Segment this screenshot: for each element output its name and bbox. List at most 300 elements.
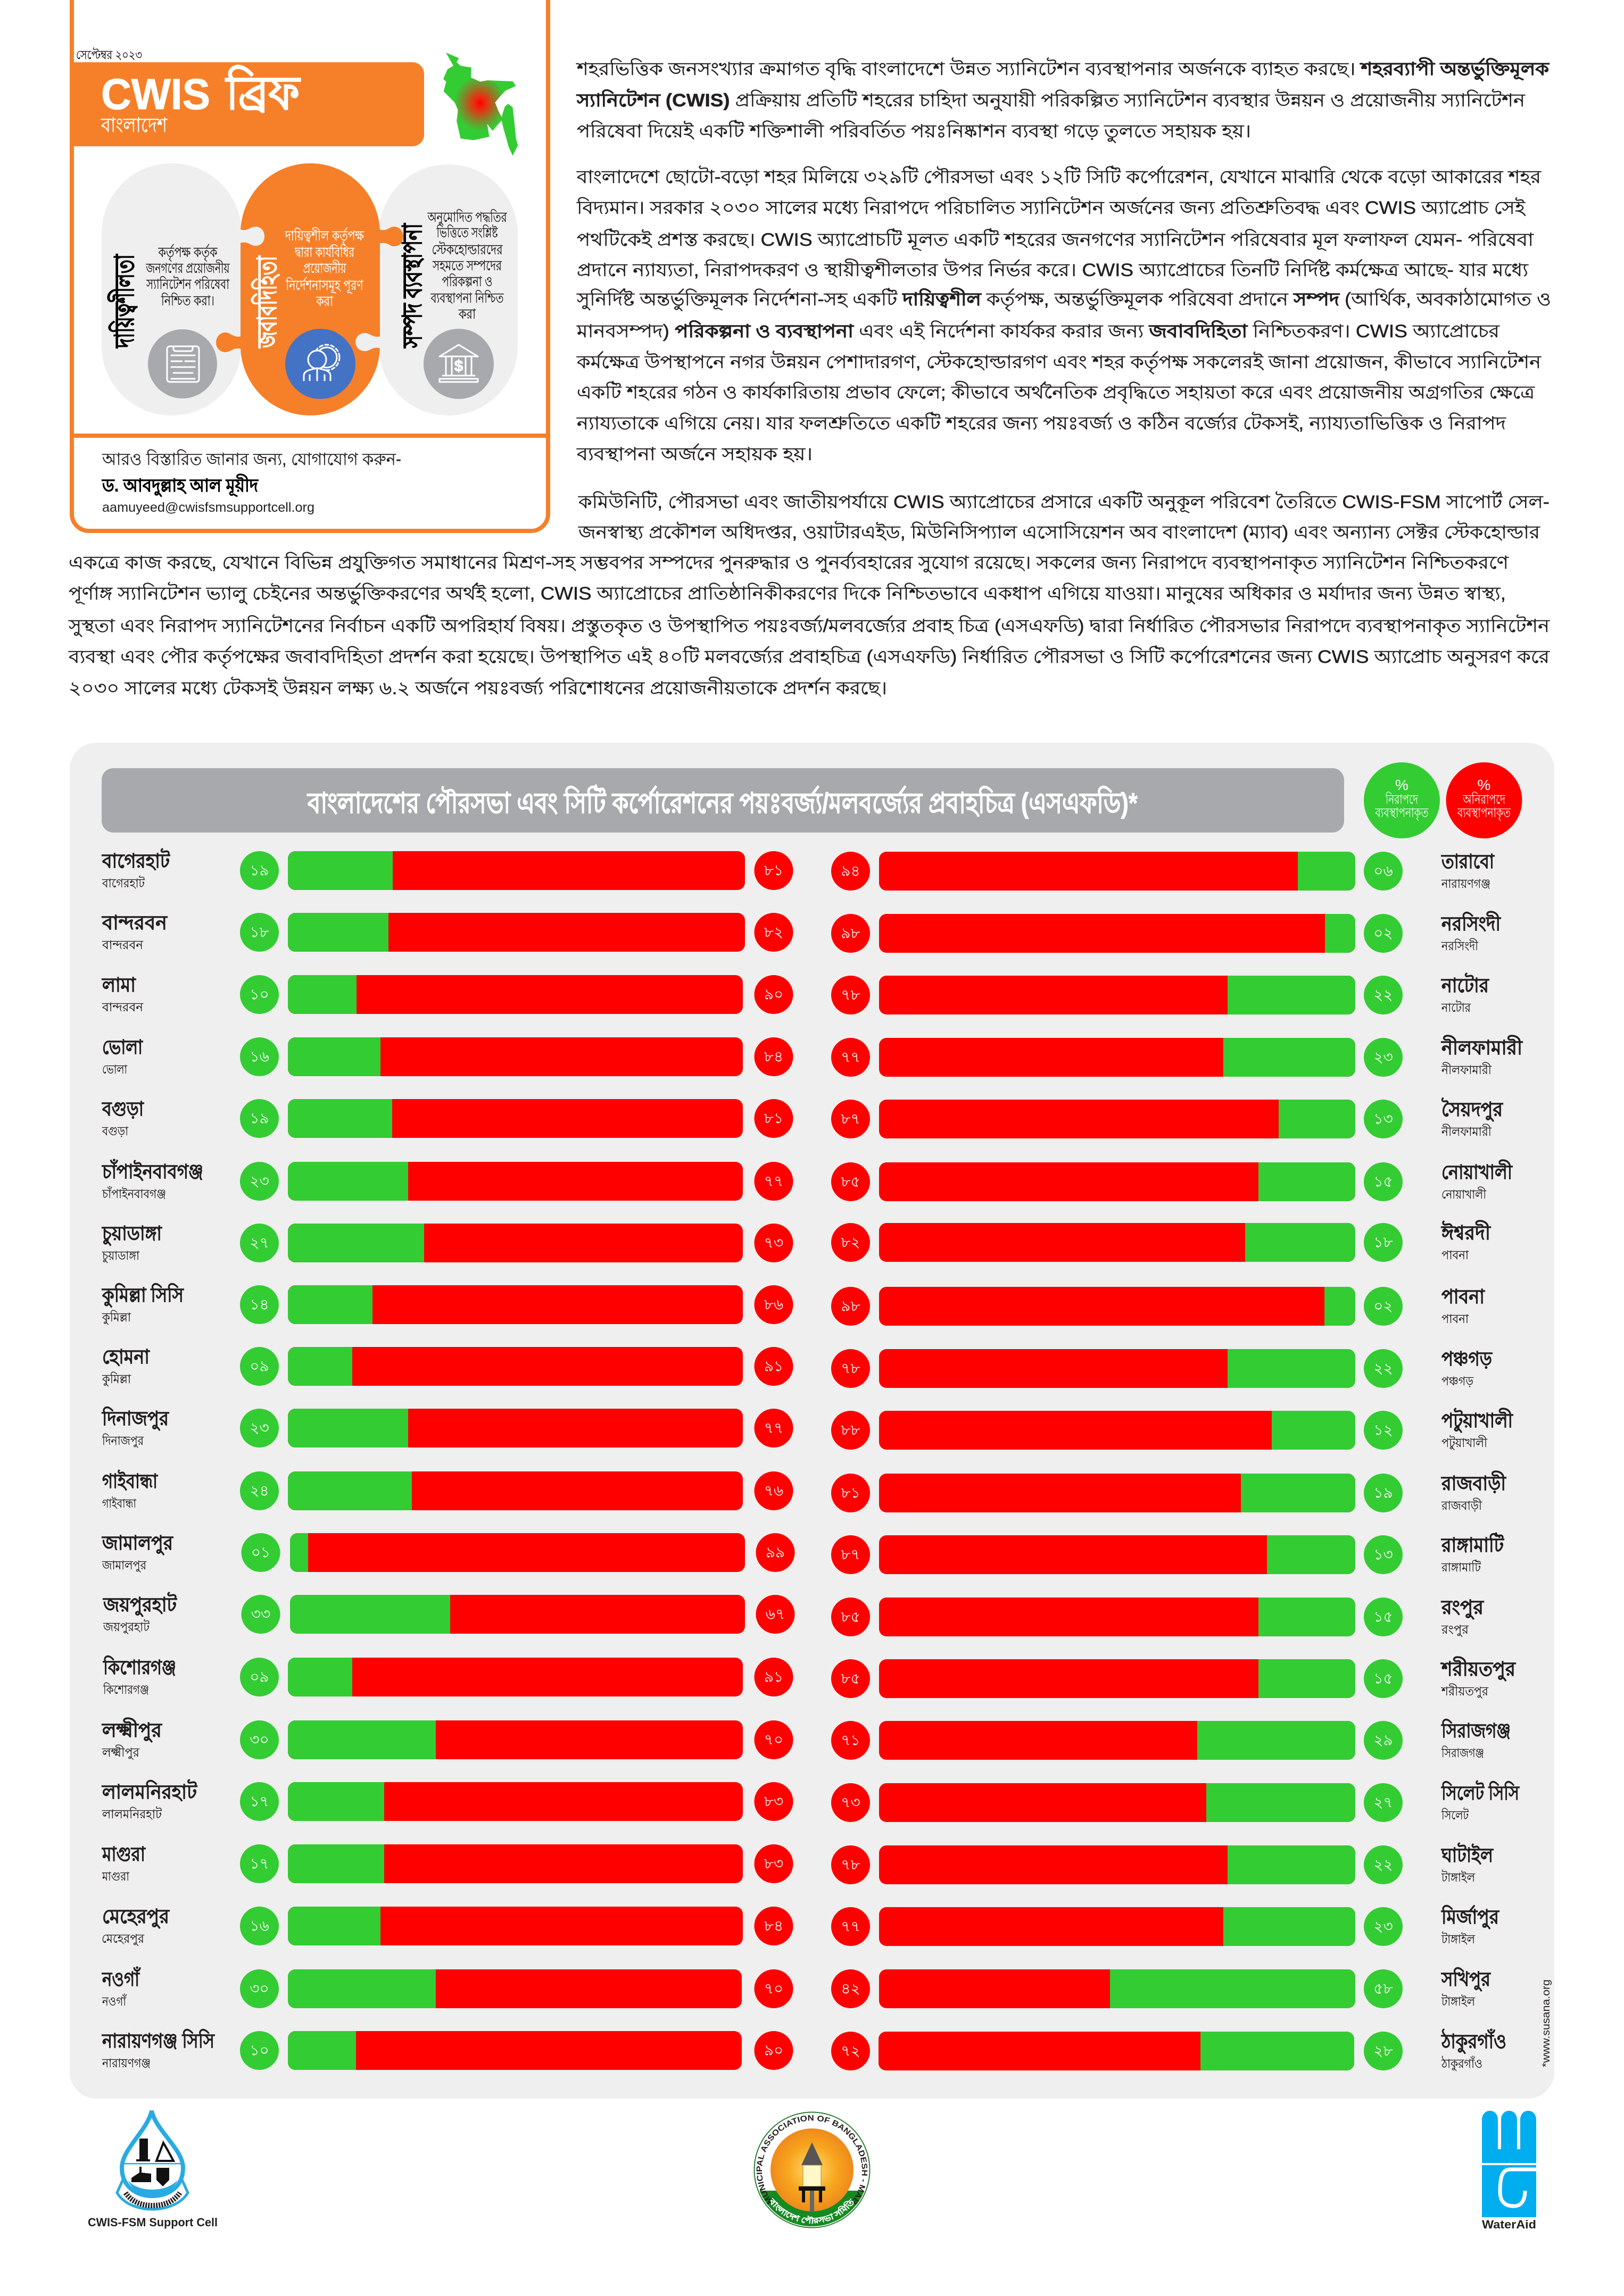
text block: CWIS approach paragraph: বাংলাদেশে ছোটো-বড়ো শহর মিলিয়ে ৩২৯টি পৌরসভা এবং ১২টি সিটি কর্পোরেশন, যেখানে মাঝারি থেকে বড়ো আকারের শহর xyxy=(576,165,1542,187)
puzzle notch: left xyxy=(239,227,264,246)
row: গাইবান্ধা: ২৪ xyxy=(250,1482,269,1499)
row: সিরাজগঞ্জ xyxy=(831,1719,1511,1760)
row: ঈশ্বরদী xyxy=(831,1220,1491,1262)
row: নোয়াখালী: ১৫ xyxy=(1373,1174,1393,1189)
row: সখিপুর xyxy=(831,1967,1491,2008)
subtitle: বাংলাদেশ xyxy=(101,114,167,137)
row: নারায়ণগঞ্জ সিসি xyxy=(101,2029,793,2070)
title: CWIS xyxy=(101,70,210,119)
row: বান্দরবন: বান্দরবন xyxy=(101,912,168,934)
seal ring xyxy=(755,2112,869,2228)
row: মির্জাপুর: ২৩ xyxy=(1373,1918,1393,1934)
row: জয়পুরহাট: ৩৩ xyxy=(251,1605,270,1623)
chart heading bar xyxy=(102,768,1344,833)
row: সৈয়দপুর: ৮৭ xyxy=(841,1111,860,1127)
row: জয়পুরহাট: জয়পুরহাট xyxy=(103,1619,150,1634)
row: সিরাজগঞ্জ: সিরাজগঞ্জ xyxy=(1440,1719,1511,1742)
row: মির্জাপুর: ৭৭ xyxy=(841,1918,860,1934)
row: রংপুর: ৮৫ xyxy=(841,1609,860,1625)
description: assets: পরিকল্পনা ও xyxy=(442,273,493,289)
row: পঞ্চগড়: ৭৮ xyxy=(841,1360,860,1377)
row: দিনাজপুর: ৭৭ xyxy=(764,1419,783,1436)
logo mark band xyxy=(117,2178,188,2209)
seal lamp post xyxy=(799,2142,825,2212)
description: assets: করা xyxy=(458,306,476,322)
row: সিলেট সিসি: সিলেট সিসি xyxy=(1440,1780,1520,1804)
heading: assets: সম্পদ ব্যবস্থাপনা xyxy=(397,223,427,348)
row: চাঁপাইনবাবগঞ্জ: ৭৭ xyxy=(764,1172,783,1189)
row: লামা: ৯০ xyxy=(764,986,783,1002)
row: লালমনিরহাট: লালমনিরহাট xyxy=(101,1779,198,1803)
row: কুমিল্লা সিসি: ১৪ xyxy=(250,1296,269,1313)
row: চাঁপাইনবাবগঞ্জ: ২৩ xyxy=(250,1172,269,1189)
row: সৈয়দপুর: সৈয়দপুর xyxy=(1441,1097,1504,1122)
heading: accountability: জবাবদিহিতা xyxy=(251,255,282,348)
row: নওগাঁ: ৭০ xyxy=(764,1980,783,1997)
row: রাজবাড়ী: ৮১ xyxy=(841,1484,860,1501)
title: ব্রিফ xyxy=(225,64,301,119)
row: গাইবান্ধা: গাইবান্ধা xyxy=(102,1469,158,1492)
row: চুয়াডাঙ্গা xyxy=(101,1222,793,1263)
text block: partnership paragraph: ২০৩০ সালের মধ্যে টেকসই উন্নয়ন লক্ষ্য ৬.২ অর্জনে পয়ঃবর্জ্য পরিশোধনের প্রয়োজনীয়তাকে প্রদর্শন করছে। xyxy=(69,677,887,698)
description: accountability: করা xyxy=(316,293,333,309)
row: নারায়ণগঞ্জ সিসি: নারায়ণগঞ্জ সিসি xyxy=(101,2029,215,2052)
row: পটুয়াখালী: ১২ xyxy=(1373,1421,1393,1438)
row: সখিপুর: টাঙ্গাইল xyxy=(1441,1994,1476,2008)
row: পাবনা: পাবনা xyxy=(1441,1286,1485,1308)
row: রংপুর: রংপুর xyxy=(1440,1596,1485,1620)
row: দিনাজপুর: দিনাজপুর xyxy=(102,1434,144,1448)
row: বান্দরবন xyxy=(101,912,793,952)
seal orange disc xyxy=(770,2128,854,2211)
logo: Municipal Association of Bangladesh xyxy=(753,2112,871,2228)
text block: introduction paragraph: পরিষেবা দিয়েই একটি শক্তিশালী পরিবর্তিত পয়ঃনিষ্কাশন ব্যবস্থা গড়ে তুলতে সহায়ক হয়। xyxy=(577,120,1251,143)
contact text: ড. আবদুল্লাহ আল মূয়ীদ xyxy=(102,473,259,497)
row: মির্জাপুর xyxy=(831,1904,1499,1946)
title xyxy=(101,64,301,119)
row: সৈয়দপুর xyxy=(831,1097,1504,1138)
row: বান্দরবন: বান্দরবন xyxy=(102,938,144,952)
text block: CWIS approach paragraph xyxy=(576,165,1551,464)
text block: CWIS approach paragraph: একটি শহরের গঠন ও কার্যকারিতায় প্রভাব ফেলে; কীভাবে অর্থনৈতিক প্রবৃদ্ধিতে সহায়তা করে এবং প্রয়োজনীয় অগ্রগতির ক্ষেত্রে xyxy=(577,381,1535,404)
row: নরসিংদী: নরসিংদী xyxy=(1441,938,1478,953)
row: দিনাজপুর: ২৩ xyxy=(250,1419,269,1436)
seal bangla name: বাংলাদেশ পৌরসভা সমিতি xyxy=(770,2198,854,2224)
legend: unsafely managed: % xyxy=(1478,777,1490,793)
description: responsibility: নিশ্চিত করা। xyxy=(161,293,214,309)
logo mark seal text xyxy=(126,2193,180,2206)
text block: partnership paragraph: একত্রে কাজ করছে, যেখানে বিভিন্ন প্রযুক্তিগত সমাধানের মিশ্রণ-সহ সম্ভবপর সম্পদের পুনরুদ্ধার ও পুনর্ব্যবহারের সুযোগ রয়েছে। সকলের জন্য নিরাপদে ব্যবস্থাপনাকৃত স্যানিটেশন নিশ্চিতকরণে xyxy=(69,551,1509,574)
row: শরীয়তপুর xyxy=(831,1656,1517,1699)
row: ঠাকুরগাঁও: ঠাকুরগাঁও xyxy=(1440,2028,1506,2054)
row: রাজবাড়ী: ১৯ xyxy=(1373,1484,1393,1501)
row: ঈশ্বরদী: পাবনা xyxy=(1441,1248,1469,1262)
description: responsibility: কর্তৃপক্ষ কর্তৃক xyxy=(158,244,218,262)
description: accountability: দায়িত্বশীল কর্তৃপক্ষ xyxy=(285,227,364,245)
row: নওগাঁ: ৩০ xyxy=(250,1980,269,1997)
description: responsibility xyxy=(146,244,230,309)
description: accountability: নির্দেশনাসমূহ পূরণ xyxy=(286,277,363,294)
row: মেহেরপুর xyxy=(102,1906,793,1946)
description: assets xyxy=(427,209,507,322)
row: তারাবো xyxy=(831,851,1495,891)
description: accountability: দ্বারা কার্যবিধির xyxy=(294,244,355,260)
row: হোমনা: ৯১ xyxy=(764,1358,783,1375)
left column rows xyxy=(101,848,795,2070)
row: জয়পুরহাট: ৬৭ xyxy=(766,1605,785,1623)
panel: SFD chart xyxy=(70,743,1554,2099)
row: নাটোর: নাটোর xyxy=(1441,1000,1471,1014)
text block: CWIS approach paragraph: ব্যবস্থাপনা অর্জনে সহায়ক হয়। xyxy=(576,443,813,464)
legend: unsafely managed: অনিরাপদে xyxy=(1462,792,1506,807)
row: নীলফামারী: নীলফামারী xyxy=(1440,1035,1523,1059)
row: সখিপুর: ৫৮ xyxy=(1373,1980,1393,1997)
row: বগুড়া: ৮১ xyxy=(764,1110,783,1127)
row: গাইবান্ধা: গাইবান্ধা xyxy=(102,1496,136,1510)
row: বগুড়া: বগুড়া xyxy=(101,1098,144,1120)
row: রাজবাড়ী: রাজবাড়ী xyxy=(1440,1470,1506,1494)
row: নারায়ণগঞ্জ সিসি: ৯০ xyxy=(764,2042,783,2059)
puzzle tab: left xyxy=(216,332,242,352)
row: লক্ষ্মীপুর xyxy=(101,1717,793,1760)
row: মাগুরা: মাগুরা xyxy=(102,1869,129,1883)
row: রাঙ্গামাটি: ৮৭ xyxy=(841,1546,860,1563)
row: পঞ্চগড়: পঞ্চগড় xyxy=(1441,1374,1474,1388)
legend: safely managed: ব্যবস্থাপনাকৃত xyxy=(1375,805,1429,821)
logo label: WaterAid xyxy=(1482,2218,1536,2231)
row: মাগুরা xyxy=(101,1843,793,1883)
row: ভোলা: ভোলা xyxy=(102,1036,143,1058)
row: বাগেরহাট: বাগেরহাট xyxy=(101,848,171,872)
contact text xyxy=(102,449,401,515)
icon: bank xyxy=(424,329,494,399)
row: মেহেরপুর: মেহেরপুর xyxy=(102,1932,144,1946)
logo label: CWIS-FSM Support Cell xyxy=(88,2216,218,2229)
row: কিশোরগঞ্জ: কিশোরগঞ্জ xyxy=(103,1683,149,1696)
puzzle tab: right xyxy=(379,227,403,246)
row: মেহেরপুর: মেহেরপুর xyxy=(102,1906,170,1929)
text block: partnership paragraph: ব্যবস্থা এবং পৌর কর্তৃপক্ষের জবাবদিহিতা প্রদর্শন করা হয়েছে। উপস্থাপিত এই ৪০টি মলবর্জ্যের প্রবাহচিত্র (এসএফডি) নির্ধারিত পৌরসভা ও সিটি কর্পোরেশনের জন্য CWIS অ্যাপ্রোচ অনুসরণ করে xyxy=(68,645,1550,669)
row: ঘাটাইল xyxy=(831,1842,1494,1884)
row: কিশোরগঞ্জ: কিশোরগঞ্জ xyxy=(102,1656,176,1678)
logo mark icons xyxy=(123,2139,181,2186)
row: পাবনা xyxy=(831,1286,1485,1326)
pillar: assets xyxy=(379,164,518,415)
row: সিলেট সিসি: ৭৩ xyxy=(841,1794,860,1811)
row: তারাবো: ৯৪ xyxy=(841,863,860,879)
row: পাবনা: ০২ xyxy=(1373,1298,1393,1314)
text block: partnership paragraph: কমিউনিটি, পৌরসভা এবং জাতীয়পর্যায়ে CWIS অ্যাপ্রোচের প্রসারে একটি অনুকূল পরিবেশ তৈরিতে CWIS-FSM সাপোর্ট সেল- xyxy=(578,490,1550,513)
row: নীলফামারী: নীলফামারী xyxy=(1441,1062,1492,1077)
row: নওগাঁ: নওগাঁ xyxy=(101,1966,141,1990)
row: ঈশ্বরদী: ঈশ্বরদী xyxy=(1440,1220,1491,1244)
icon: bank: $ xyxy=(454,357,463,375)
row: মেহেরপুর: ১৬ xyxy=(250,1917,269,1934)
right column rows xyxy=(831,851,1523,2071)
row: হোমনা xyxy=(102,1346,793,1386)
row: জামালপুর: জামালপুর xyxy=(101,1532,173,1555)
row: কুমিল্লা সিসি: ৮৬ xyxy=(764,1296,783,1313)
row: চুয়াডাঙ্গা: ৭৩ xyxy=(764,1234,783,1251)
description: accountability: প্রয়োজনীয় xyxy=(303,260,346,276)
row: চুয়াডাঙ্গা: চুয়াডাঙ্গা xyxy=(102,1249,139,1263)
row: রংপুর: রংপুর xyxy=(1441,1623,1469,1637)
row: ঠাকুরগাঁও xyxy=(831,2028,1506,2071)
row: হোমনা: হোমনা xyxy=(102,1346,150,1368)
row: ভোলা xyxy=(102,1036,793,1076)
row: রাঙ্গামাটি: রাঙ্গামাটি xyxy=(1440,1532,1505,1556)
text block: partnership paragraph xyxy=(68,490,1550,698)
row: লামা: লামা xyxy=(101,974,136,996)
row: সিরাজগঞ্জ: সিরাজগঞ্জ xyxy=(1441,1746,1484,1760)
row: নাটোর xyxy=(831,972,1489,1014)
row: রাজবাড়ী: রাজবাড়ী xyxy=(1441,1498,1482,1512)
row: লালমনিরহাট xyxy=(101,1779,793,1821)
row: নীলফামারী: ৭৭ xyxy=(841,1049,860,1065)
row: সৈয়দপুর: ১৩ xyxy=(1373,1111,1393,1127)
row: লামা xyxy=(101,974,793,1014)
row: রংপুর xyxy=(831,1596,1485,1637)
row: কিশোরগঞ্জ: ০৯ xyxy=(250,1668,269,1685)
row: মাগুরা: মাগুরা xyxy=(101,1843,146,1865)
text block: partnership paragraph: জনস্বাস্থ্য প্রকৌশল অধিদপ্তর, ওয়াটারএইড, মিউনিসিপ্যাল এসোসিয়েশন অব বাংলাদেশ (ম্যাব) এবং অন্যান্য সেক্টর স্টেকহোল্ডার xyxy=(578,521,1540,543)
seal green band xyxy=(760,2191,864,2226)
row: চুয়াডাঙ্গা: চুয়াডাঙ্গা xyxy=(101,1222,162,1246)
heading: responsibility: দায়িত্বশীলতা xyxy=(107,254,139,348)
row: সিলেট সিসি xyxy=(831,1780,1520,1822)
description: assets: সহমতে সম্পদের xyxy=(432,257,502,273)
text block: introduction paragraph: স্যানিটেশন (CWIS) প্রক্রিয়ায় প্রতিটি শহরের চাহিদা অনুযায়ী পরিকল্পিত স্যানিটেশন ব্যবস্থার উন্নয়ন ও প্রয়োজনীয় স্যানিটেশন xyxy=(576,88,1526,111)
card frame xyxy=(72,0,548,531)
row: সিরাজগঞ্জ: ২৯ xyxy=(1373,1732,1393,1748)
row: মির্জাপুর: টাঙ্গাইল xyxy=(1441,1932,1476,1946)
row: পাবনা: পাবনা xyxy=(1441,1312,1469,1326)
description: responsibility: স্যানিটেশন পরিষেবা xyxy=(146,276,229,292)
row: চাঁপাইনবাবগঞ্জ xyxy=(101,1159,793,1201)
logo: CWIS-FSM Support Cell xyxy=(88,2111,218,2229)
row: ঘাটাইল: ৭৮ xyxy=(841,1857,860,1873)
chart heading bar: বাংলাদেশের পৌরসভা এবং সিটি কর্পোরেশনের পয়ঃবর্জ্য/মলবর্জ্যের প্রবাহচিত্র (এসএফডি)* xyxy=(306,784,1138,819)
row: গাইবান্ধা xyxy=(102,1469,793,1510)
row: পঞ্চগড় xyxy=(831,1348,1493,1388)
logo mark lower block xyxy=(1482,2165,1536,2217)
row: হোমনা: কুমিল্লা xyxy=(102,1372,131,1386)
row: দিনাজপুর xyxy=(101,1407,793,1448)
logo: WaterAid xyxy=(1482,2111,1536,2231)
row: শরীয়তপুর: শরীয়তপুর xyxy=(1440,1656,1517,1682)
row: নাটোর: ২২ xyxy=(1373,986,1393,1003)
row: পটুয়াখালী xyxy=(831,1408,1513,1450)
row: ঈশ্বরদী: ১৮ xyxy=(1373,1234,1393,1250)
row: সখিপুর: ৪২ xyxy=(841,1980,860,1997)
row: বান্দরবন: ৮২ xyxy=(764,924,783,941)
row: বাগেরহাট: ৮১ xyxy=(764,862,783,879)
row: নোয়াখালী: নোয়াখালী xyxy=(1441,1159,1513,1183)
row: জয়পুরহাট xyxy=(102,1592,795,1634)
row: কুমিল্লা সিসি xyxy=(101,1283,793,1325)
legend: unsafely managed xyxy=(1446,762,1522,838)
row: চুয়াডাঙ্গা: ২৭ xyxy=(250,1234,269,1251)
date: সেপ্টেম্বর ২০২৩ xyxy=(76,47,142,62)
text block: CWIS approach paragraph: কর্মক্ষেত্র উপস্থাপনে নগর উন্নয়ন পেশাদারগণ, স্টেকহোল্ডারগণ এবং শহর কর্তৃপক্ষ সকলেরই জানা প্রয়োজন, কীভাবে স্যানিটেশন xyxy=(576,351,1542,375)
text block: CWIS approach paragraph: মানবসম্পদ) পরিকল্পনা ও ব্যবস্থাপনা এবং এই নির্দেশনা কার্যকর করার জন্য জবাবদিহিতা নিশ্চিতকরণ। CWIS অ্যাপ্রোচের xyxy=(576,320,1500,342)
row: ঠাকুরগাঁও: ৭২ xyxy=(841,2043,860,2059)
row: হোমনা: ০৯ xyxy=(250,1358,269,1375)
row: নরসিংদী: নরসিংদী xyxy=(1440,911,1501,935)
text block: CWIS approach paragraph: বিদ্যমান। সরকার ২০৩০ সালের মধ্যে নিরাপদে পরিচালিত স্যানিটেশন অর্জনের জন্য প্রতিশ্রুতিবদ্ধ এবং CWIS অ্যাপ্রোচ সেই xyxy=(576,196,1526,218)
row: সিলেট সিসি: ২৭ xyxy=(1373,1794,1393,1811)
row: কিশোরগঞ্জ xyxy=(102,1656,793,1696)
row: ভোলা: ৮৪ xyxy=(764,1048,783,1065)
row: নরসিংদী: ৯৮ xyxy=(841,925,860,942)
row: সখিপুর: সখিপুর xyxy=(1440,1967,1491,1992)
row: লামা: বান্দরবন xyxy=(102,1000,144,1014)
icon: people and gear xyxy=(285,329,355,399)
row: জয়পুরহাট: জয়পুরহাট xyxy=(102,1592,178,1617)
row: মাগুরা: ১৭ xyxy=(250,1856,269,1871)
panel: CWIS brief card xyxy=(70,0,550,531)
logo mark swirl xyxy=(1500,2169,1536,2206)
footnote source: *www.susana.org xyxy=(1540,1979,1552,2067)
row: ভোলা: ১৬ xyxy=(250,1048,269,1065)
row: ঠাকুরগাঁও: ২৮ xyxy=(1373,2043,1393,2059)
row: নীলফামারী xyxy=(831,1035,1523,1077)
text block: CWIS approach paragraph: সুনির্দিষ্ট অন্তর্ভুক্তিমূলক নির্দেশনা-সহ একটি দায়িত্বশীল কর্তৃপক্ষ, অন্তর্ভুক্তিমূলক পরিষেবা প্রদানে সম্পদ (আর্থিক, অবকাঠামোগত ও xyxy=(576,287,1551,312)
description: assets: স্টেকহোল্ডারদের xyxy=(432,241,503,257)
description: assets: ভিত্তিতে সংশ্লিষ্ট xyxy=(436,224,498,240)
row: লক্ষ্মীপুর: লক্ষ্মীপুর xyxy=(101,1717,163,1743)
row: ঈশ্বরদী: ৮২ xyxy=(841,1234,860,1250)
legend: unsafely managed: ব্যবস্থাপনাকৃত xyxy=(1457,805,1511,821)
row: বাগেরহাট: ১৯ xyxy=(250,862,269,879)
seal name: MUNICIPAL ASSOCIATION OF BANGLADESH - MAB xyxy=(757,2115,867,2205)
row: নারায়ণগঞ্জ সিসি: ১০ xyxy=(250,2042,269,2059)
row: সিরাজগঞ্জ: ৭১ xyxy=(841,1732,860,1748)
text block: CWIS approach paragraph: প্রদানে ন্যায্যতা, নিরাপদকরণ ও স্থায়ীত্বশীলতার উপর নির্ভর করে। CWIS অ্যাপ্রোচের তিনটি নির্দিষ্ট কর্মক্ষেত্র আছে- যার মধ্যে xyxy=(577,259,1529,280)
row: শরীয়তপুর: ৮৫ xyxy=(841,1670,860,1686)
text block: partnership paragraph: পূর্ণাঙ্গ স্যানিটেশন ভ্যালু চেইনের অন্তর্ভুক্তিকরণের অর্থই হলো, CWIS অ্যাপ্রোচের প্রাতিষ্ঠানিকীকরণের দিকে নিশ্চিতভাবে একধাপ এগিয়ে যাওয়া। মানুষের অধিকার ও মর্যাদার জন্য উন্নত স্বাস্থ্য, xyxy=(69,582,1506,605)
contact divider xyxy=(70,434,550,438)
row: চাঁপাইনবাবগঞ্জ: চাঁপাইনবাবগঞ্জ xyxy=(102,1186,166,1201)
row: পটুয়াখালী: পটুয়াখালী xyxy=(1441,1408,1513,1433)
row: মাগুরা: ৮৩ xyxy=(764,1856,783,1871)
legend: safely managed: নিরাপদে xyxy=(1385,792,1419,807)
icon: clipboard xyxy=(148,329,217,398)
row: লক্ষ্মীপুর: ৩০ xyxy=(250,1731,269,1748)
row: নাটোর: ৭৮ xyxy=(841,986,860,1003)
row: পাবনা: ৯৮ xyxy=(841,1298,860,1314)
row: রাঙ্গামাটি: রাঙ্গামাটি xyxy=(1441,1560,1481,1574)
description: assets: অনুমোদিত পদ্ধতির xyxy=(427,209,507,226)
text block: partnership paragraph: সুস্থতা এবং নিরাপদ স্যানিটেশনের নির্বাচন একটি অপরিহার্য বিষয়। প্রস্তুতকৃত ও উপস্থাপিত পয়ঃবর্জ্য/মলবর্জ্যের প্রবাহ চিত্র (এসএফডি) দ্বারা নির্ধারিত পৌরসভার নিরাপদে ব্যবস্থাপনাকৃত স্যানিটেশন xyxy=(68,614,1550,637)
row: নরসিংদী: ০২ xyxy=(1373,925,1393,942)
row: লালমনিরহাট: ৮৩ xyxy=(764,1793,783,1810)
row: পঞ্চগড়: পঞ্চগড় xyxy=(1441,1348,1493,1370)
row: পঞ্চগড়: ২২ xyxy=(1373,1360,1393,1377)
row: নওগাঁ xyxy=(101,1966,793,2008)
row: নওগাঁ: নওগাঁ xyxy=(102,1994,127,2008)
row: তারাবো: নারায়ণগঞ্জ xyxy=(1441,877,1490,891)
row: শরীয়তপুর: শরীয়তপুর xyxy=(1441,1684,1488,1699)
description: accountability xyxy=(285,227,364,309)
row: মির্জাপুর: মির্জাপুর xyxy=(1440,1904,1499,1929)
row: বগুড়া: ১৯ xyxy=(250,1110,269,1127)
panel background xyxy=(70,743,1554,2099)
logo mark upper lobes xyxy=(1482,2111,1536,2163)
row: নোয়াখালী xyxy=(831,1159,1513,1201)
row: লালমনিরহাট: লালমনিরহাট xyxy=(102,1807,162,1821)
pillar: responsibility xyxy=(102,163,242,415)
row: মেহেরপুর: ৮৪ xyxy=(764,1917,783,1934)
row: জামালপুর: জামালপুর xyxy=(102,1558,146,1573)
row: নরসিংদী xyxy=(831,911,1501,953)
row: তারাবো: তারাবো xyxy=(1440,851,1495,872)
row: রংপুর: ১৫ xyxy=(1373,1609,1393,1625)
row: ঠাকুরগাঁও: ঠাকুরগাঁও xyxy=(1441,2056,1482,2071)
row: বাগেরহাট xyxy=(101,848,793,890)
row: তারাবো: ০৬ xyxy=(1373,863,1393,879)
row: নাটোর: নাটোর xyxy=(1440,972,1489,996)
description: assets: ব্যবস্থাপনা নিশ্চিত xyxy=(430,290,504,306)
text block: CWIS approach paragraph: পথটিকেই প্রশস্ত করছে। CWIS অ্যাপ্রোচটি মূলত একটি শহরের জনগণের স্যানিটেশন পরিষেবার মূল ফলাফল যেমন- পরিষেবা xyxy=(577,228,1534,251)
text block: introduction paragraph xyxy=(576,57,1550,143)
row: লক্ষ্মীপুর: লক্ষ্মীপুর xyxy=(102,1745,139,1760)
title banner xyxy=(70,62,424,146)
row: রাজবাড়ী xyxy=(831,1470,1506,1512)
row: কিশোরগঞ্জ: ৯১ xyxy=(764,1668,783,1685)
row: দিনাজপুর: দিনাজপুর xyxy=(101,1407,169,1431)
pillar: accountability xyxy=(216,163,403,415)
row: পটুয়াখালী: ৮৮ xyxy=(841,1421,860,1438)
row: লামা: ১০ xyxy=(250,986,269,1002)
row: কুমিল্লা সিসি: কুমিল্লা সিসি xyxy=(101,1283,184,1308)
row: বাগেরহাট: বাগেরহাট xyxy=(102,876,145,890)
row: বান্দরবন: ১৮ xyxy=(250,924,269,941)
row: চাঁপাইনবাবগঞ্জ: চাঁপাইনবাবগঞ্জ xyxy=(101,1159,203,1183)
row: শরীয়তপুর: ১৫ xyxy=(1373,1670,1393,1686)
logo mark lower crescent xyxy=(128,2180,178,2195)
logo mark drop xyxy=(122,2111,183,2196)
row: লক্ষ্মীপুর: ৭০ xyxy=(764,1731,783,1748)
row: নোয়াখালী: ৮৫ xyxy=(841,1174,860,1189)
row: কুমিল্লা সিসি: কুমিল্লা xyxy=(102,1310,131,1325)
description: responsibility: জনগণের প্রয়োজনীয় xyxy=(146,260,230,276)
row: জামালপুর: ৯৯ xyxy=(766,1544,785,1561)
row: নারায়ণগঞ্জ সিসি: নারায়ণগঞ্জ xyxy=(102,2056,151,2070)
row: ঘাটাইল: টাঙ্গাইল xyxy=(1441,1870,1476,1884)
row: জামালপুর xyxy=(101,1532,795,1573)
row: গাইবান্ধা: ৭৬ xyxy=(764,1482,783,1499)
row: সৈয়দপুর: নীলফামারী xyxy=(1441,1124,1492,1138)
row: বগুড়া: বগুড়া xyxy=(102,1124,128,1138)
contact text: aamuyeed@cwisfsmsupportcell.org xyxy=(102,500,314,515)
row: রাঙ্গামাটি: ১৩ xyxy=(1373,1546,1393,1563)
text block: introduction paragraph: শহরভিত্তিক জনসংখ্যার ক্রমাগত বৃদ্ধি বাংলাদেশে উন্নত স্যানিটেশন ব্যবস্থাপনার অর্জনকে ব্যাহত করছে। শহরব্যাপী অন্তর্ভুক্তিমূলক xyxy=(576,57,1550,81)
row: পটুয়াখালী: পটুয়াখালী xyxy=(1441,1435,1487,1450)
legend: safely managed xyxy=(1364,762,1440,838)
icon: Bangladesh map xyxy=(443,53,518,156)
legend: safely managed: % xyxy=(1395,777,1408,793)
row: ঘাটাইল: ২২ xyxy=(1373,1857,1393,1873)
puzzle notch: right xyxy=(355,333,381,351)
contact text: আরও বিস্তারিত জানার জন্য, যোগাযোগ করুন- xyxy=(102,449,401,469)
row: লালমনিরহাট: ১৭ xyxy=(250,1793,269,1810)
row: ভোলা: ভোলা xyxy=(102,1062,127,1076)
row: নোয়াখালী: নোয়াখালী xyxy=(1441,1187,1486,1201)
row: নীলফামারী: ২৩ xyxy=(1373,1049,1393,1065)
row: সিলেট সিসি: সিলেট xyxy=(1441,1808,1469,1822)
text block: CWIS approach paragraph: ন্যায্যতাকে এগিয়ে নেয়। যার ফলশ্রুতিতে একটি শহরের জন্য পয়ঃবর্জ্য ও কঠিন বর্জ্যের টেকসই, ন্যায্যতাভিত্তিক ও নিরাপদ xyxy=(576,412,1506,434)
